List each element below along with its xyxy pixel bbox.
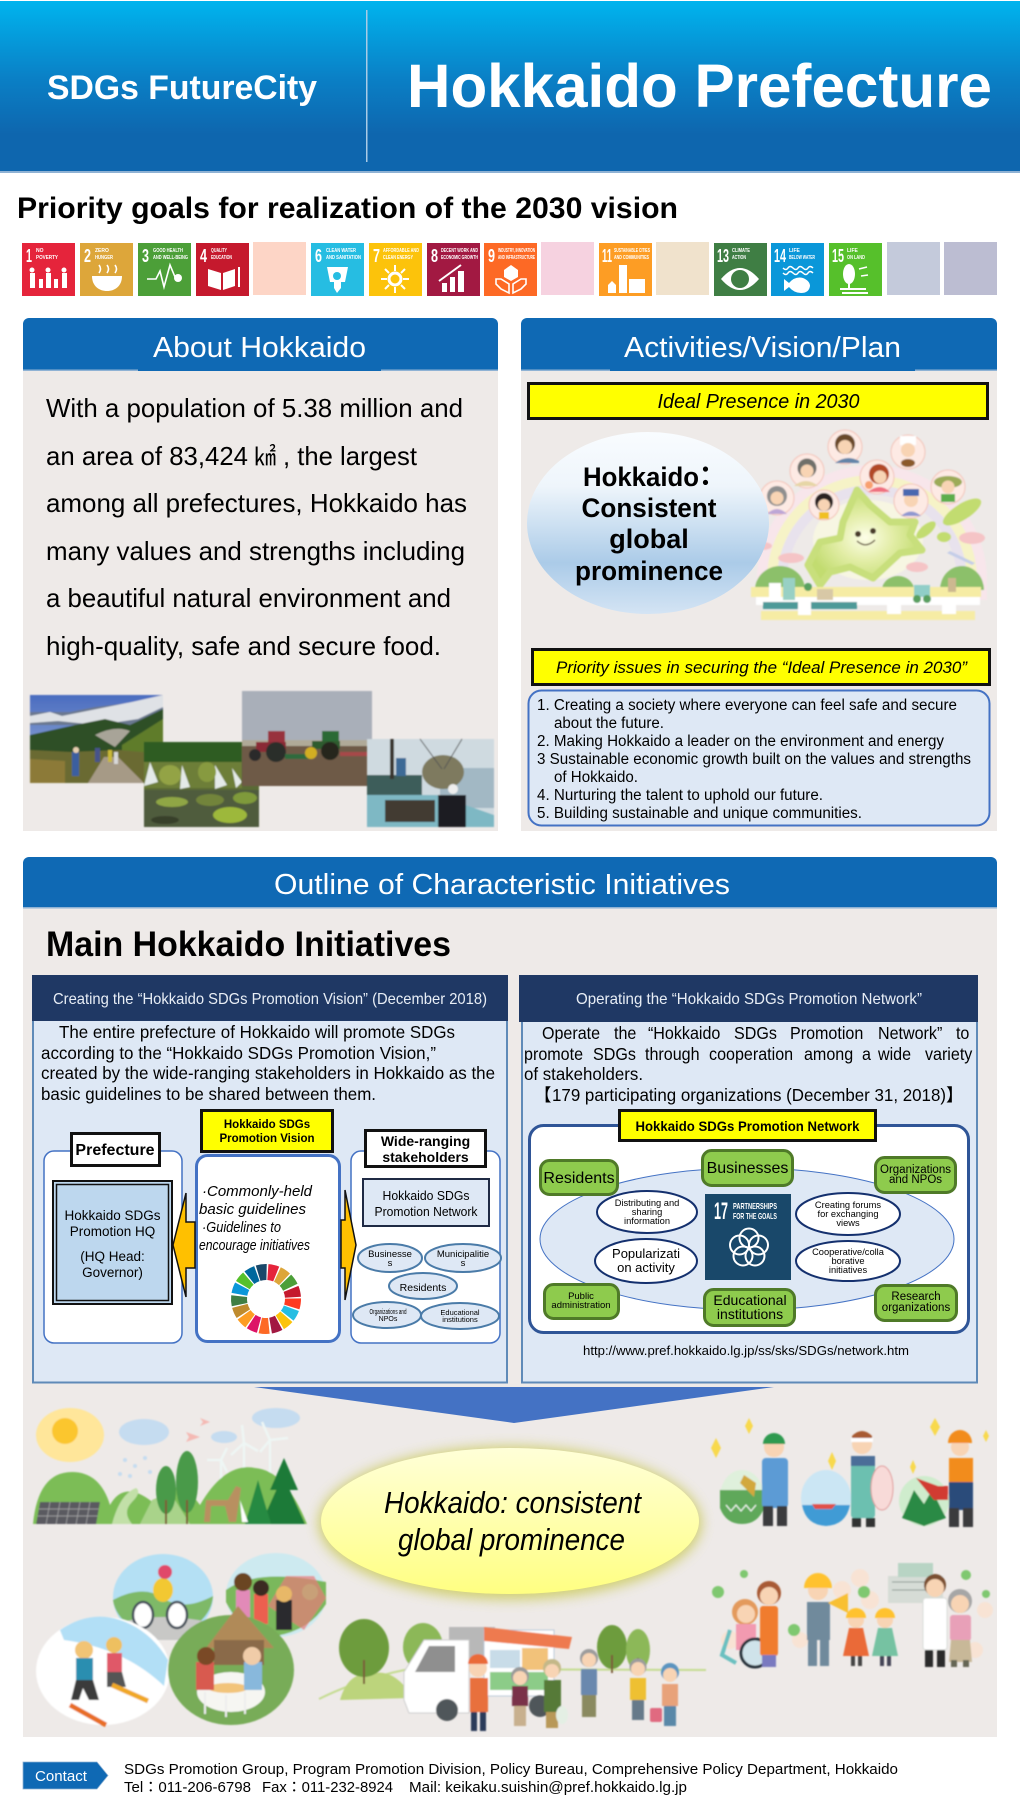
vision ellipse	[527, 432, 769, 614]
paragraph	[46, 393, 467, 661]
goal 2	[80, 243, 133, 296]
vision ellipse: global	[609, 524, 689, 554]
vision column: Hokkaido SDGs	[224, 1119, 310, 1131]
goal 17 tile: PARTNERSHIPS	[733, 1201, 777, 1211]
outcome ellipse: global prominence	[398, 1522, 625, 1557]
goal 15: ON LAND	[847, 255, 865, 261]
illustration: community people	[712, 1563, 993, 1667]
activity ellipses: on activity	[617, 1260, 675, 1275]
goal 7: AFFORDABLE AND	[383, 248, 419, 254]
description: variety	[925, 1044, 973, 1064]
banner: ideal presence: Ideal Presence in 2030	[658, 391, 860, 413]
contact details: SDGs Promotion Group, Program Promotion Division, Policy Bureau, Comprehensive Policy Department, Hokkaido	[124, 1761, 898, 1778]
goal 17 tile: FOR THE GOALS	[733, 1211, 777, 1221]
title: Hokkaido Prefecture	[407, 52, 992, 120]
contact tag	[23, 1762, 108, 1789]
illustration: nature and energy	[33, 1408, 307, 1524]
description: to	[956, 1023, 969, 1043]
description: “Hokkaido	[648, 1023, 720, 1043]
goal 14: BELOW WATER	[789, 255, 815, 261]
goal 1: POVERTY	[36, 255, 59, 261]
paragraph: , the largest	[283, 441, 418, 471]
illustration: mobile shop truck	[319, 1619, 706, 1731]
stakeholders column: Organizations and	[370, 1309, 407, 1316]
description: 】	[946, 1085, 964, 1105]
vision ellipse: Consistent	[582, 493, 717, 523]
description: Network”	[878, 1023, 942, 1043]
paragraph: ㎢	[254, 444, 276, 471]
stakeholders column: Businesse	[368, 1249, 412, 1260]
activity ellipses: views	[836, 1218, 860, 1228]
stakeholder nodes: and NPOs	[889, 1174, 942, 1186]
dinner at the lodge	[168, 1606, 294, 1725]
goal 5 faded	[253, 242, 306, 295]
tourists	[226, 1553, 326, 1637]
activity ellipses: Cooperative/colla	[812, 1247, 885, 1257]
stakeholder nodes: Businesses	[707, 1160, 788, 1177]
banner: priority issues: Priority issues in securing the “Ideal Presence in 2030”	[556, 658, 968, 677]
SDG colour wheel	[228, 1261, 304, 1337]
stakeholders column: Wide-ranging	[381, 1133, 470, 1149]
goal 4: 4	[200, 246, 207, 266]
children	[843, 1608, 869, 1666]
island	[813, 500, 923, 580]
goal 16 faded	[887, 242, 940, 295]
goal 9	[484, 243, 537, 296]
card: promotion vision	[32, 975, 508, 1382]
truck	[404, 1627, 572, 1721]
activity ellipses: initiatives	[829, 1265, 867, 1275]
outcome ellipse: Hokkaido: consistent	[384, 1485, 642, 1520]
stakeholders column: Residents	[400, 1282, 446, 1294]
photo: mossy stream	[144, 742, 259, 827]
subtitle: SDGs FutureCity	[47, 69, 317, 107]
HQ box: (HQ Head:	[80, 1249, 145, 1264]
activity ellipses: Creating forums	[815, 1200, 881, 1210]
skiing	[36, 1617, 170, 1725]
illustration: leisure and tourism clusters	[36, 1553, 326, 1725]
activity ellipses: information	[624, 1216, 670, 1226]
description: Promotion	[790, 1023, 863, 1043]
network title	[620, 1110, 876, 1140]
SDG goal icons row	[22, 242, 997, 296]
goal 4	[196, 243, 249, 296]
activity ellipses	[595, 1191, 900, 1283]
description: the	[614, 1023, 636, 1043]
elderly person	[948, 1589, 972, 1667]
description: 179 participating organizations (December 31, 2018)	[552, 1085, 946, 1105]
goal 15: LIFE	[847, 248, 858, 254]
prefecture column: Prefecture	[75, 1142, 155, 1159]
banner: ideal presence	[528, 384, 988, 418]
goal 8: ECONOMIC GROWTH	[441, 255, 478, 261]
forester	[916, 1430, 973, 1527]
photo: fishing boat	[367, 739, 494, 827]
description: according to the “Hokkaido SDGs Promotion Vision,”	[41, 1043, 436, 1063]
card: promotion network	[519, 975, 978, 1382]
description: cooperation	[709, 1044, 793, 1064]
goal 14	[771, 243, 824, 296]
goal 2: HUNGER	[95, 255, 113, 261]
description: among	[804, 1044, 853, 1064]
priority issues list	[528, 690, 990, 826]
priority issues list: about the future.	[554, 715, 664, 732]
heading: Outline of Characteristic Initiatives	[274, 869, 730, 901]
hospital	[888, 1563, 943, 1603]
activity ellipses: borative	[831, 1256, 865, 1266]
cycling	[113, 1554, 213, 1640]
description	[41, 1022, 495, 1104]
goal 9: 9	[488, 246, 495, 266]
goal 1: 1	[26, 246, 32, 266]
goal 14: 14	[774, 246, 786, 266]
stakeholder nodes: Research	[891, 1291, 941, 1303]
activity ellipses: sharing	[632, 1207, 662, 1217]
goal 14: LIFE	[789, 248, 800, 254]
panel: activities, vision, plan	[521, 318, 997, 831]
stakeholders column: stakeholders	[382, 1149, 469, 1165]
activity ellipses: Distributing and	[615, 1198, 679, 1208]
goal 7: 7	[373, 246, 380, 266]
goal 10 faded	[541, 242, 594, 295]
HQ box: Hokkaido SDGs	[64, 1208, 161, 1223]
priority issues list: of Hokkaido.	[554, 769, 638, 786]
goal 13: CLIMATE	[732, 248, 751, 254]
stakeholder nodes: administration	[551, 1300, 611, 1311]
paragraph: high-quality, safe and secure food.	[46, 631, 441, 661]
network diagram	[530, 1110, 968, 1332]
vision ellipse: prominence	[575, 556, 723, 586]
network title: Hokkaido SDGs Promotion Network	[636, 1119, 860, 1134]
description	[524, 1023, 973, 1105]
heading: About Hokkaido	[153, 332, 366, 364]
heading: Activities/Vision/Plan	[624, 332, 901, 364]
stakeholder nodes: Residents	[543, 1170, 615, 1187]
goal 3: 3	[142, 246, 149, 266]
stakeholder nodes: Organizations	[880, 1164, 951, 1176]
prefecture column	[44, 1134, 182, 1343]
description: SDGs	[734, 1023, 777, 1043]
fisher	[851, 1431, 893, 1527]
stakeholder nodes: institutions	[717, 1306, 783, 1322]
goal 8: DECENT WORK AND	[441, 248, 478, 254]
contact details: Fax：011-232-8924	[262, 1779, 393, 1796]
activity ellipses: Popularizati	[612, 1246, 680, 1261]
description: SDGs	[593, 1044, 636, 1064]
vision column: encourage initiatives	[199, 1237, 310, 1254]
stakeholders column: Hokkaido SDGs	[382, 1188, 470, 1203]
URL: http://www.pref.hokkaido.lg.jp/ss/sks/SDGs/network.htm	[583, 1344, 909, 1358]
stakeholders column: institutions	[442, 1315, 478, 1324]
person medallions	[760, 430, 965, 520]
contact details	[124, 1761, 898, 1796]
illustration: Hokkaido with rainbow and people	[751, 430, 985, 620]
HQ box: Promotion HQ	[70, 1224, 155, 1239]
stakeholders column: s	[388, 1258, 393, 1269]
activity ellipses: for exchanging	[818, 1209, 878, 1219]
arrow: to stakeholders	[341, 1190, 356, 1300]
description: 【	[534, 1085, 552, 1105]
subheading: Main Hokkaido Initiatives	[46, 925, 451, 964]
description: Operate	[542, 1023, 600, 1043]
stakeholders column: Educational	[440, 1308, 480, 1317]
goal 4: EDUCATION	[211, 255, 232, 261]
goal 9: AND INFRASTRUCTURE	[498, 255, 535, 261]
goal 1: NO	[36, 248, 44, 254]
helper	[757, 1581, 781, 1667]
outcome ellipse	[318, 1446, 702, 1600]
wheelchair user	[722, 1599, 769, 1667]
stakeholders column: Municipalitie	[437, 1249, 489, 1260]
description: a	[862, 1044, 872, 1064]
card: promotion vision: Creating the “Hokkaido SDGs Promotion Vision” (December 2018)	[53, 991, 487, 1008]
HQ box: Governor)	[82, 1265, 143, 1280]
description: promote	[524, 1044, 583, 1064]
goal 1	[22, 243, 75, 296]
card: promotion network: Operating the “Hokkaido SDGs Promotion Network”	[576, 991, 922, 1008]
stakeholder nodes	[540, 1150, 956, 1326]
paragraph: a beautiful natural environment and	[46, 583, 451, 613]
goal 13: 13	[717, 246, 729, 266]
banner: priority issues	[532, 650, 990, 684]
vision ellipse: Hokkaido	[583, 462, 699, 492]
goal 7: CLEAN ENERGY	[383, 255, 413, 261]
paragraph: With a population of 5.38 million and	[46, 393, 463, 423]
goal 17 tile: 17	[714, 1198, 728, 1225]
contact details: Mail: keikaku.suishin@pref.hokkaido.lg.jp	[409, 1779, 687, 1796]
priority issues list: 3 Sustainable economic growth built on the values and strengths	[537, 751, 971, 768]
goal 11	[599, 243, 652, 296]
clouds and plane	[752, 532, 985, 572]
goal 11: AND COMMUNITIES	[614, 255, 649, 261]
arrow: to prefecture	[173, 1193, 195, 1297]
vision column: ·Commonly-held	[202, 1183, 313, 1200]
goal 6: CLEAN WATER	[326, 248, 356, 254]
panel: about Hokkaido	[23, 318, 498, 831]
stakeholder nodes: organizations	[882, 1302, 950, 1314]
goal 15: 15	[832, 246, 844, 266]
photo: mountain trail	[30, 695, 163, 783]
goal 6	[311, 243, 364, 296]
town landscape	[751, 566, 984, 620]
goal 12 faded	[656, 242, 709, 295]
man with megaphone	[804, 1573, 848, 1666]
doctor	[923, 1574, 947, 1667]
panel: outline of characteristic initiatives	[23, 857, 997, 1737]
goal 15	[829, 243, 882, 296]
goal 3: GOOD HEALTH	[153, 248, 183, 254]
stakeholders column: NPOs	[379, 1316, 398, 1323]
HQ box	[53, 1181, 172, 1304]
goal 8: 8	[431, 246, 438, 266]
goal 13	[714, 243, 767, 296]
description: through	[645, 1044, 700, 1064]
photo: tractors	[242, 691, 372, 786]
goal 11: SUSTAINABLE CITIES	[614, 248, 650, 254]
priority issues list: 5. Building sustainable and unique communities.	[537, 805, 862, 822]
shoppers	[468, 1654, 488, 1731]
paragraph: an area of 83,424	[46, 441, 248, 471]
contact details: Tel：011-206-6798	[124, 1779, 251, 1796]
heading: priority goals: Priority goals for realization of the 2030 vision	[17, 192, 678, 225]
description: The entire prefecture of Hokkaido will promote SDGs	[59, 1022, 455, 1042]
goal 7	[369, 243, 422, 296]
goal 6: AND SANITATION	[326, 255, 361, 261]
illustration: primary-industry workers	[711, 1418, 989, 1527]
goal 9: INDUSTRY, INNOVATION	[498, 248, 535, 254]
goal 2: 2	[84, 246, 91, 266]
vision ellipse: ：	[692, 462, 719, 492]
contact tag: Contact	[35, 1768, 88, 1785]
description: wide	[877, 1044, 911, 1064]
goal 4: QUALITY	[211, 248, 227, 254]
goal 13: ACTION	[732, 255, 746, 261]
arrow: down to outcome	[254, 1387, 774, 1423]
priority issues list: 1. Creating a society where everyone can feel safe and secure	[537, 697, 957, 714]
priority issues list: 2. Making Hokkaido a leader on the environment and energy	[537, 733, 944, 750]
vision column: basic guidelines	[199, 1201, 306, 1218]
description: of stakeholders.	[524, 1064, 643, 1084]
header banner	[0, 1, 1020, 173]
stakeholder nodes: Public	[568, 1291, 594, 1302]
description: basic guidelines to be shared between them.	[41, 1084, 376, 1104]
vision column	[196, 1110, 340, 1342]
stakeholders column: Promotion Network	[374, 1204, 478, 1219]
paragraph: among all prefectures, Hokkaido has	[46, 488, 467, 518]
vision column: ·Guidelines to	[202, 1219, 281, 1236]
stakeholders column: s	[461, 1258, 466, 1269]
goal 2: ZERO	[95, 248, 109, 254]
goal 17 faded	[944, 242, 997, 295]
stakeholder nodes: Educational	[713, 1292, 787, 1308]
paragraph: many values and strengths including	[46, 536, 465, 566]
goal 6: 6	[315, 246, 322, 266]
stakeholders column	[351, 1130, 501, 1343]
vision column: Promotion Vision	[220, 1133, 314, 1145]
description: created by the wide-ranging stakeholders in Hokkaido as the	[41, 1063, 495, 1083]
goal 11: 11	[602, 246, 612, 266]
goal 17 tile	[705, 1194, 791, 1280]
farmer	[762, 1433, 788, 1526]
goal 3	[138, 243, 191, 296]
goal 8	[427, 243, 480, 296]
goal 3: AND WELL-BEING	[153, 255, 188, 261]
priority issues list: 4. Nurturing the talent to uphold our future.	[537, 787, 823, 804]
